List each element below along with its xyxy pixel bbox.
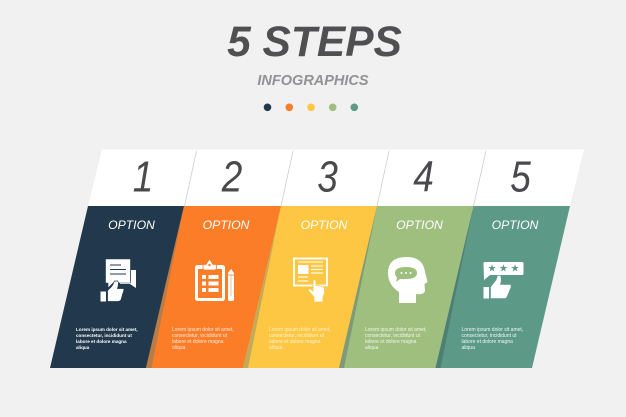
number 5: 5: [510, 153, 531, 201]
icon: head with speech bubble: [388, 257, 428, 303]
text block 3: aliqua: [269, 345, 283, 351]
panel 5 shadow: [436, 206, 474, 368]
number 2: 2: [221, 153, 242, 201]
text block 3: Lorem ipsum dolor sit amet,: [269, 327, 331, 333]
subtitle: INFOGRAPHICS: [257, 73, 369, 89]
option label 4: OPTION: [396, 218, 443, 232]
panel 4: [339, 206, 474, 368]
panel 2: [146, 206, 282, 368]
text block 5: Lorem ipsum dolor sit amet,: [462, 327, 523, 333]
text block 5: labore et dolore magna: [462, 339, 513, 345]
icon: chat with thumbs up: [100, 259, 136, 302]
icon: rating stars with thumbs up: ★: [499, 264, 508, 274]
text block 4: [365, 327, 427, 351]
text block 3: labore et dolore magna: [269, 339, 321, 345]
text block 2: aliqua: [172, 345, 186, 351]
panel 1: [50, 206, 185, 368]
text block 2: [172, 327, 234, 351]
icon: rating stars with thumbs up: ★: [511, 264, 520, 274]
icon: rating stars with thumbs up: ★: [488, 264, 497, 274]
text block 4: aliqua: [365, 345, 379, 351]
text block 4: labore et dolore magna: [365, 339, 417, 345]
text block 1: [76, 327, 138, 350]
number 3: 3: [317, 153, 338, 201]
white number band: [88, 150, 584, 206]
panel 5: [436, 206, 570, 368]
panel 3: [243, 206, 378, 368]
option label 5: OPTION: [492, 218, 539, 232]
panel 4 shadow: [339, 206, 377, 368]
text block 5: aliqua: [462, 345, 475, 351]
text block 2: consectetur, incididunt ut: [172, 333, 228, 339]
icon: document with hand: [294, 258, 327, 302]
text block 1: labore et dolore magna: [76, 339, 127, 344]
icon: rating stars with thumbs up: [484, 262, 524, 298]
text block 3: [269, 327, 331, 351]
panel 2 shadow: [146, 206, 184, 368]
text block 1: consectetur, incididunt ut: [76, 333, 132, 338]
text block 4: consectetur, incididunt ut: [365, 333, 421, 339]
text block 1: Lorem ipsum dolor sit amet,: [76, 327, 138, 332]
text block 3: consectetur, incididunt ut: [269, 333, 325, 339]
text block 5: consectetur, incididunt ut: [462, 333, 517, 339]
icon: clipboard and pencil: [195, 259, 234, 301]
text block 5: [462, 327, 523, 351]
number 4: 4: [413, 153, 434, 201]
number 1: 1: [133, 153, 153, 201]
band separators: [184, 151, 486, 206]
text block 2: labore et dolore magna: [172, 339, 224, 345]
text block 2: Lorem ipsum dolor sit amet,: [172, 327, 234, 333]
title: 5 STEPS: [227, 19, 402, 66]
option label 2: OPTION: [203, 218, 250, 232]
panel 3 shadow: [243, 206, 281, 368]
legend dots: [264, 104, 358, 111]
option label 1: OPTION: [108, 218, 155, 232]
option label 3: OPTION: [301, 218, 348, 232]
text block 1: aliqua: [76, 345, 90, 350]
text block 4: Lorem ipsum dolor sit amet,: [365, 327, 427, 333]
